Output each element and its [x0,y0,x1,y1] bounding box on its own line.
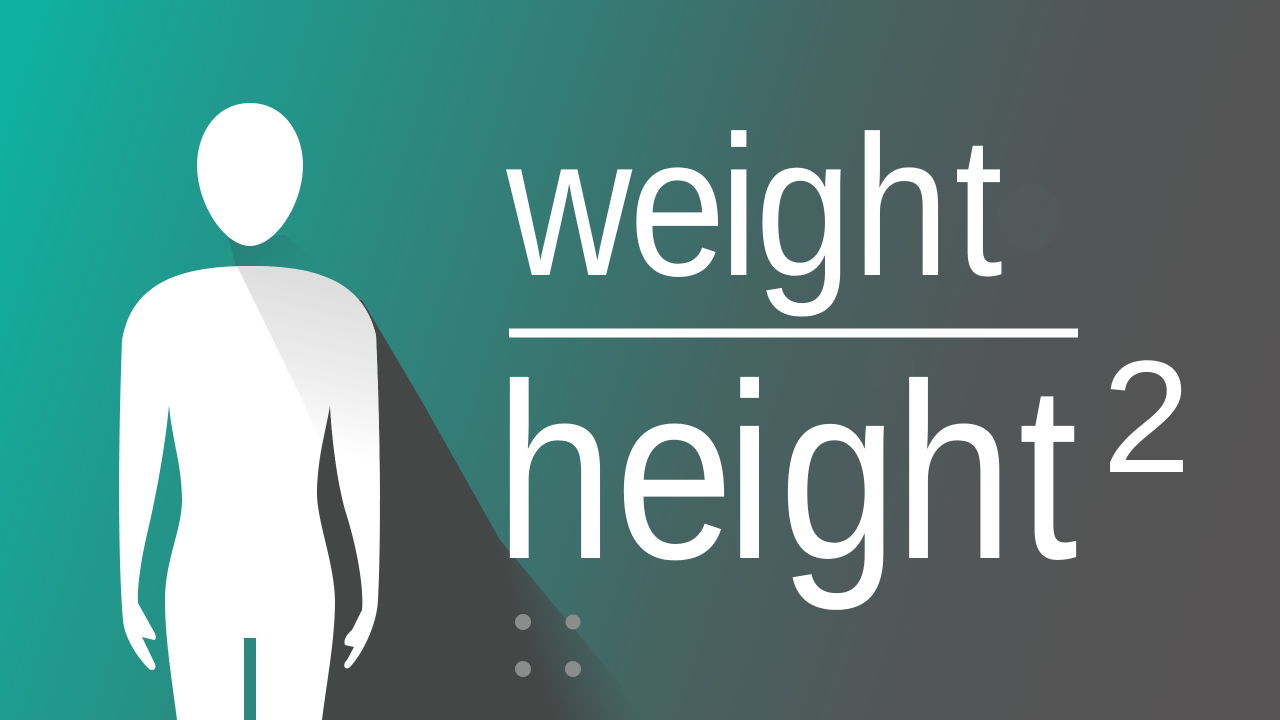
superscript 2: 2 [1102,327,1191,506]
neck shadow [228,235,345,285]
decorative dots [515,614,581,677]
icon: human figure [119,103,390,720]
formula denominator: height: height [495,332,1078,612]
long cast shadow of figure [300,300,650,720]
faint background circles [865,184,1063,390]
figure body [119,266,380,720]
fraction bar [509,328,1078,338]
figure head [197,103,303,246]
body shading wedge [235,262,390,500]
formula numerator: weight: weight [505,94,1003,318]
